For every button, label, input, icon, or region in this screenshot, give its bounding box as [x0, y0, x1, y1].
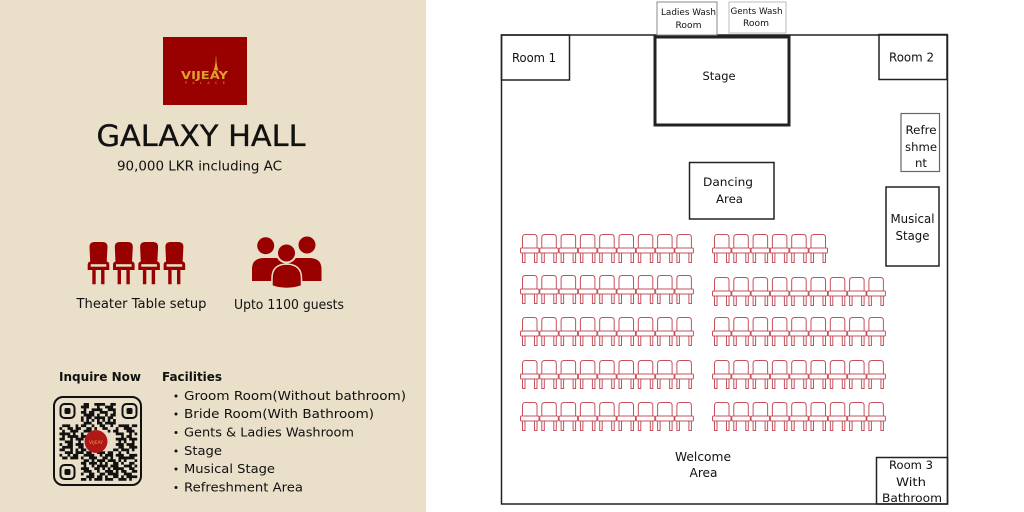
- title: GALAXY HALL: [96, 119, 306, 153]
- room: Room 3 with bathroom: [876, 458, 948, 505]
- list: facilities: Bride Room(With Bathroom): [184, 406, 374, 421]
- room: Gents wash room: Room: [743, 19, 769, 29]
- panel: left info background: [0, 0, 426, 512]
- dancing area: [690, 162, 774, 219]
- list: facilities: Gents & Ladies Washroom: [184, 424, 354, 440]
- room: Ladies wash room: Ladies Wash: [661, 8, 716, 18]
- list: facilities: Stage: [184, 443, 222, 458]
- list: facilities: Musical Stage: [184, 461, 275, 476]
- label: theater setup: Theater Table setup: [75, 297, 206, 312]
- label: guests: Upto 1100 guests: [234, 298, 344, 313]
- icon: theater chairs: [88, 242, 185, 284]
- welcome area label: Welcome: [675, 450, 731, 464]
- list: facilities: [174, 388, 406, 494]
- room: Ladies wash room: Room: [676, 21, 702, 31]
- price subtitle: 90,000 LKR including AC: [117, 160, 282, 174]
- room: Room 3 with bathroom: With: [896, 475, 926, 489]
- room: Gents wash room: [729, 2, 786, 33]
- heading: inquire now: Inquire Now: [59, 369, 141, 384]
- list: facilities: Groom Room(Without bathroom): [184, 388, 406, 403]
- heading: facilities: Facilities: [162, 369, 222, 384]
- logo: Vijeay Palace: VIJEAY: [181, 69, 229, 82]
- musical stage: [886, 187, 939, 266]
- musical stage: Musical: [890, 212, 934, 226]
- room: refreshment: Refre: [906, 123, 936, 137]
- logo: Vijeay Palace: [163, 37, 247, 105]
- room: Room 3 with bathroom: Bathroom: [882, 491, 942, 505]
- QR code: [54, 397, 141, 485]
- musical stage: Stage: [896, 229, 930, 243]
- list: facilities: Refreshment Area: [184, 480, 303, 494]
- room: refreshment: [901, 114, 940, 172]
- seating: left block: [520, 234, 693, 430]
- room: Room 2: [879, 34, 947, 80]
- seating: right block: [712, 234, 885, 430]
- stage: [655, 37, 789, 125]
- room: Ladies wash room: [657, 2, 717, 35]
- room: refreshment: nt: [915, 156, 927, 170]
- room: refreshment: shme: [905, 140, 937, 154]
- stage: Stage: [702, 69, 736, 83]
- dancing area: Dancing: [703, 175, 753, 189]
- panel: floor plan outline: [502, 35, 948, 504]
- dancing area: Area: [716, 192, 743, 206]
- room: Room 3 with bathroom: Room 3: [889, 458, 933, 472]
- room: Room 1: Room 1: [512, 51, 556, 65]
- logo: Vijeay Palace: PALACE: [185, 81, 225, 85]
- room: Gents wash room: Gents Wash: [730, 7, 782, 17]
- QR code: VIJEAY: [89, 440, 103, 446]
- icon: guests: [252, 236, 322, 288]
- welcome area label: [675, 450, 731, 480]
- room: Room 2: Room 2: [889, 50, 934, 64]
- room: Room 1: [502, 35, 570, 80]
- welcome area label: Area: [690, 466, 718, 480]
